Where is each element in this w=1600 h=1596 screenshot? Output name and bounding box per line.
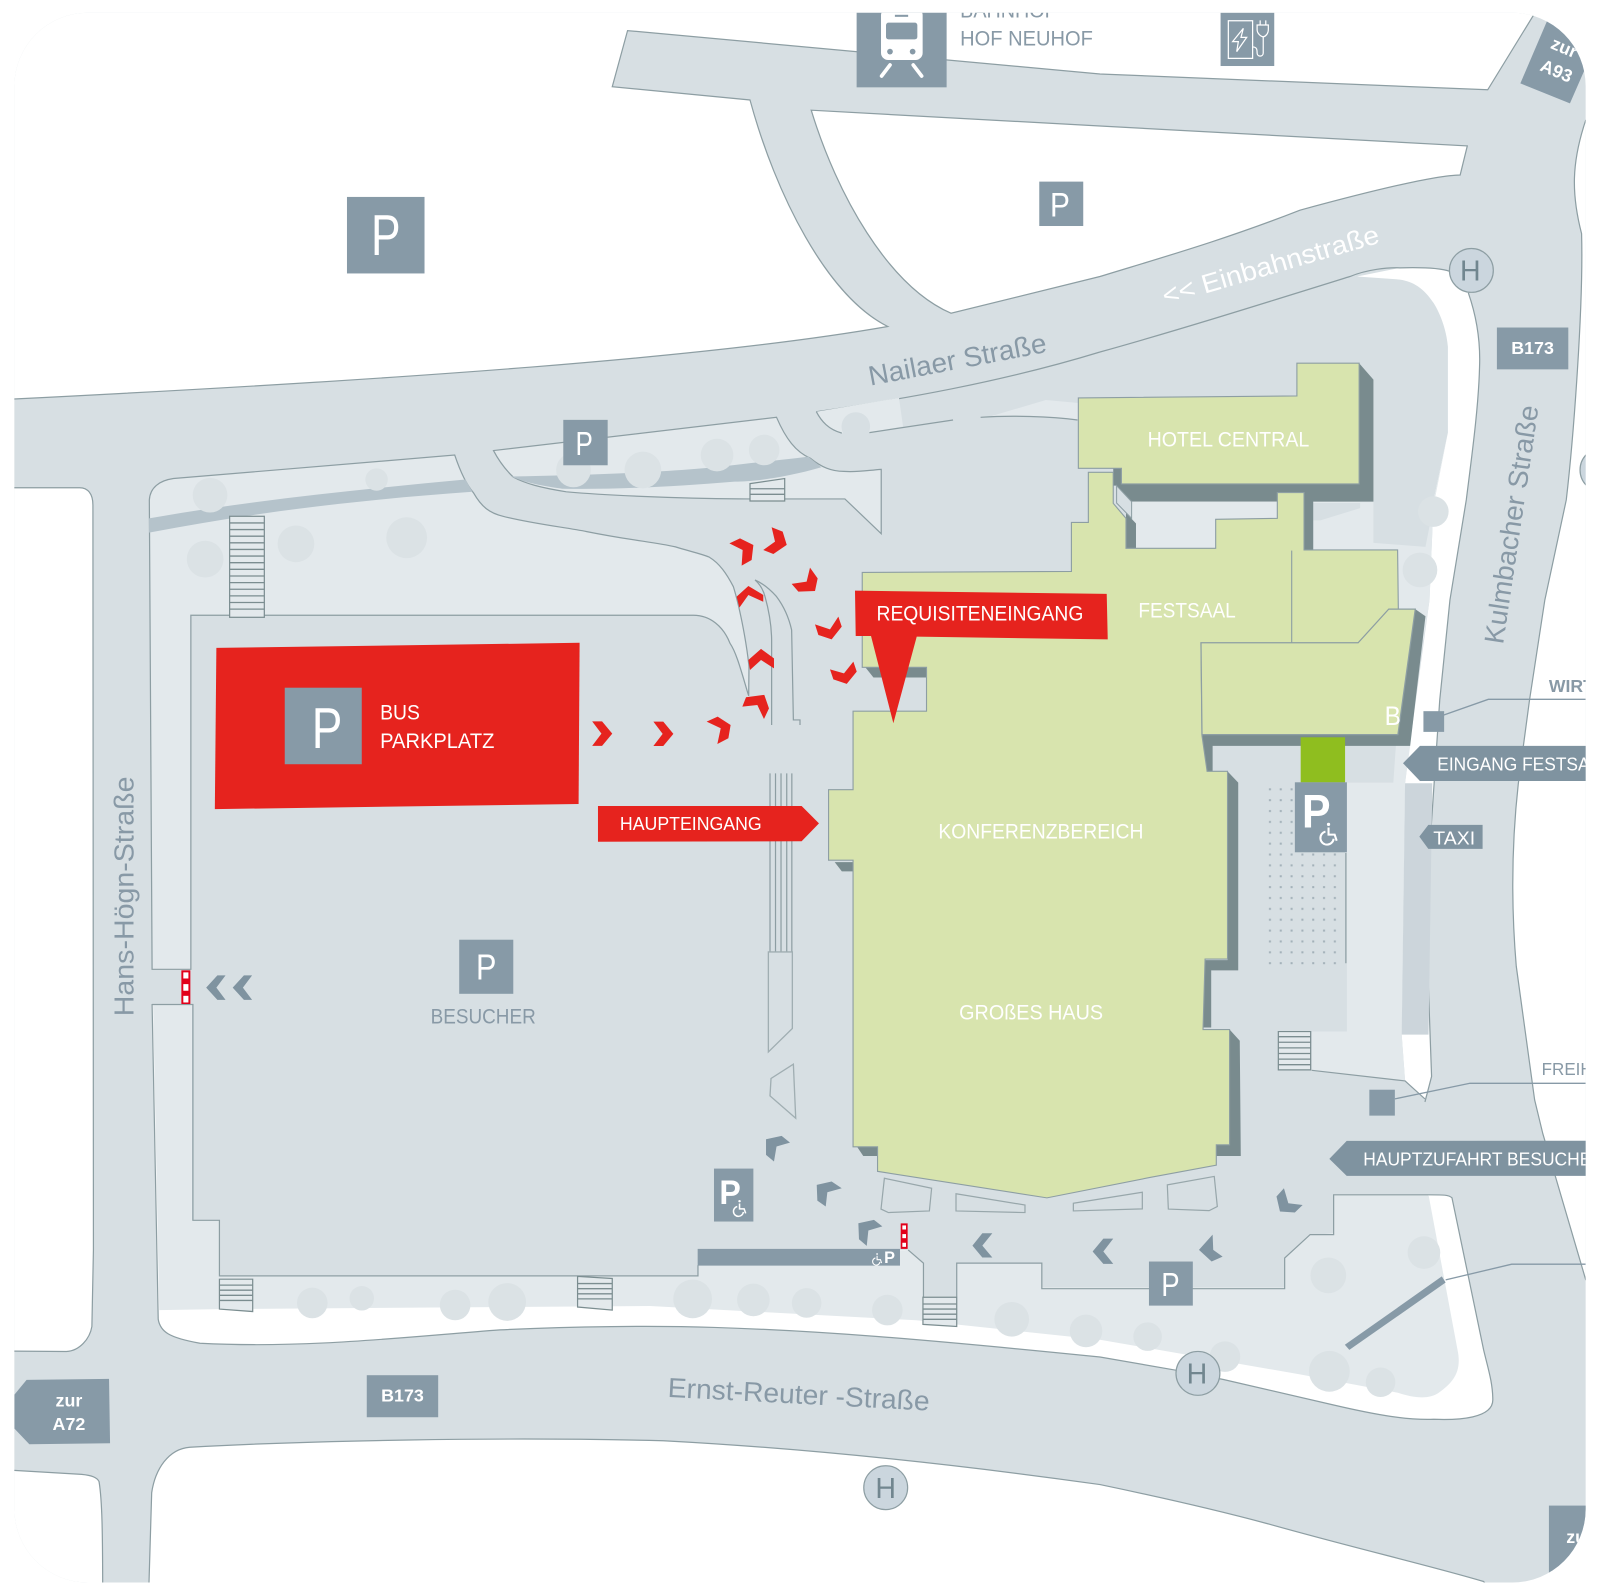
building: Hotel Central: [1078, 363, 1359, 484]
parking sign: Besucher: BESUCHER: [431, 1005, 536, 1028]
building: Festsaal wing B: [1201, 551, 1415, 735]
forecourt planters: [881, 1176, 1217, 1213]
building labels: FESTSAAL: [1138, 599, 1236, 622]
sign: Taxi: [1419, 825, 1483, 849]
bus stop: Ernst-Reuter north: H: [1187, 1359, 1207, 1391]
route arrows: red chevrons to Requisiteneingang: [592, 527, 857, 746]
parking edge lines south: [152, 1005, 1429, 1297]
bus stop: Kulmbacher north: H: [1460, 256, 1481, 288]
accessible parking sign: forecourt: [714, 1169, 753, 1222]
building labels: GROßES HAUS: [959, 1001, 1103, 1024]
callout: Wirtschaft marker: [1423, 676, 1594, 732]
bus parking label: BUS: [380, 701, 420, 724]
light forecourt east: [1312, 746, 1410, 1081]
building labels: [938, 429, 1401, 1024]
accessible parking sign: east: P: [1302, 785, 1331, 837]
road sign: zur A93: A93: [1537, 55, 1575, 87]
arrows: forecourt route: [766, 1136, 1303, 1264]
road sign: zur A72: zur: [56, 1391, 82, 1411]
main entrance walkway: [768, 773, 796, 1118]
stairs: north-west: [230, 516, 264, 617]
road sign: zur A93: [1520, 21, 1597, 103]
road sign: B173 east: B173: [1511, 338, 1554, 358]
road sign: bottom right: zur: [1566, 1527, 1593, 1547]
road sign: B173 east: [1497, 328, 1568, 369]
road sign: zur A72: [14, 1379, 110, 1444]
stairs: south row: [219, 1276, 957, 1326]
courtyard: [1117, 486, 1277, 548]
road sign: B173 south: B173: [381, 1386, 424, 1406]
parking sign: north-east: P: [1050, 186, 1070, 224]
stairs: north centre: [750, 479, 785, 501]
sign: Taxi: TAXI: [1433, 827, 1475, 848]
light planted area: south: [153, 1005, 1459, 1397]
road name: Kulmbacher Strasse: Kulmbacher Straße: [1478, 403, 1545, 646]
bus stop: Ernst-Reuter south: H: [875, 1473, 896, 1505]
green band left: [149, 480, 472, 533]
parking sign: Besucher: P: [476, 948, 496, 988]
Ernst-Reuter-Strasse upper kerb: [152, 1004, 1493, 1419]
barrier south: [901, 1223, 908, 1249]
Nailaer Strasse lower kerb: [816, 352, 1100, 412]
white margin along Ernst-Reuter-Strasse: [152, 1005, 1493, 1419]
callout: Wirtschaft marker: WIRT: [1549, 676, 1594, 696]
building shadows: [835, 363, 1425, 1156]
accessible parking sign: east: [1295, 782, 1347, 852]
light area east of hotel: [1313, 433, 1449, 641]
road sign: B173 south: [367, 1375, 438, 1417]
road name: Einbahnstrasse: << Einbahnstraße: [1159, 219, 1383, 311]
callout: Haupteingang: HAUPTEINGANG: [620, 813, 762, 834]
taxi lane: [1402, 783, 1432, 1035]
station label: [960, 0, 1093, 51]
road sign: zur A93: zur: [1548, 33, 1581, 62]
panel: bus parking: [215, 643, 580, 809]
bus parking label: PARKPLATZ: [380, 730, 495, 753]
bus stop: east edge: [1580, 448, 1600, 492]
white margin right of venue: [1357, 268, 1480, 1099]
callout: Haupteingang: [598, 806, 819, 842]
callout: Freiheitshalle marker: FREIH: [1542, 1059, 1593, 1079]
callout: Requisiteneingang: [855, 591, 1108, 723]
trees south: [297, 1236, 1440, 1397]
sign: Eingang Festsaal: [1403, 746, 1600, 781]
bus parking label: [380, 701, 495, 753]
building labels: B: [1385, 701, 1401, 731]
parking sign: north-east: [1039, 182, 1083, 226]
parking sign: south: [1149, 1262, 1193, 1306]
accessible parking sign: forecourt: P: [719, 1174, 741, 1212]
sign: Hauptzufahrt Besucher: [1329, 1141, 1600, 1176]
bus stop: Kulmbacher north: [1449, 248, 1493, 292]
road name: Ernst-Reuter-Strasse: Ernst-Reuter -Straße: [667, 1372, 931, 1417]
building labels: KONFERENZBEREICH: [938, 821, 1143, 844]
bus parking sign: [285, 688, 362, 764]
building labels: HOTEL CENTRAL: [1148, 429, 1309, 452]
road name: Nailaer Strasse: Nailaer Straße: [866, 327, 1049, 392]
parking sign: large north: P: [371, 204, 401, 268]
parking sign: Besucher: [431, 940, 536, 1028]
parking sign: south: P: [1161, 1267, 1180, 1304]
light planted area: small islands: [816, 398, 1079, 433]
access lanes beside entry: [755, 580, 800, 725]
arrows: entry west: [206, 975, 252, 1000]
light planted area: north-west with entry curve: [149, 455, 749, 969]
road name: Hans-Hoegn-Strasse: Hans-Högn-Straße: [109, 776, 140, 1016]
parking sign: Nailaer: P: [576, 426, 593, 463]
entrance Festsaal green marker: [1301, 737, 1345, 782]
accessible parking bar: [698, 1249, 900, 1267]
road sign: bottom right: [1549, 1506, 1600, 1587]
parking sign: large north: [347, 197, 425, 273]
accessible parking bar: P: [884, 1249, 895, 1267]
station icon: train: [857, 8, 947, 87]
callout: Freiheitshalle marker: [1369, 1059, 1593, 1116]
barrier west: [181, 970, 190, 1004]
callout: Requisiteneingang: REQUISITENEINGANG: [877, 602, 1083, 625]
parking sign: Nailaer: [563, 420, 608, 465]
bus stop: Ernst-Reuter south: [864, 1466, 908, 1510]
stairs: east: [1278, 1032, 1311, 1070]
icon: EV charging station: [1221, 13, 1274, 66]
bus stop: Ernst-Reuter north: [1176, 1351, 1220, 1395]
trees north: [201, 412, 870, 512]
panel: bus parking: P: [312, 697, 342, 761]
tactile dot field: [1268, 788, 1336, 964]
green band centre: [511, 457, 821, 489]
pergola bar with callout line: [1345, 1264, 1586, 1350]
station label: HOF NEUHOF: [960, 27, 1093, 51]
light planted area: north centre: [493, 417, 881, 534]
road sign: zur A72: A72: [53, 1414, 85, 1434]
building: main hall and Festsaal: [829, 472, 1398, 1198]
